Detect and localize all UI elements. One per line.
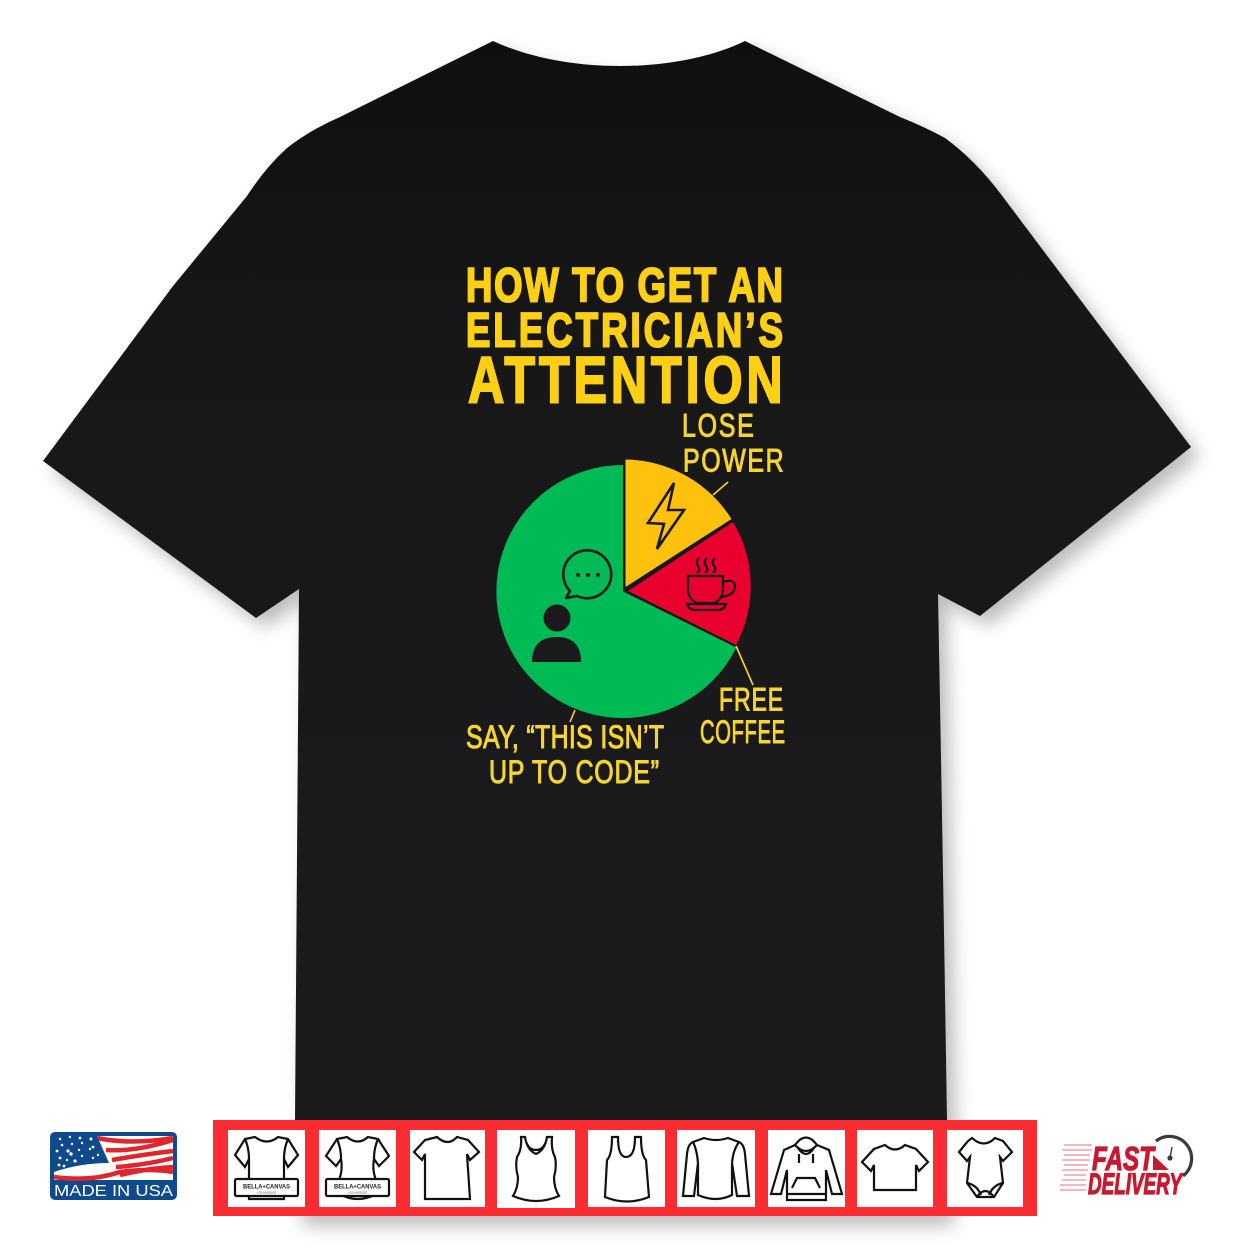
icon: coffee cup bbox=[687, 558, 735, 610]
pie labels bbox=[466, 409, 785, 791]
icon: person bbox=[532, 604, 581, 662]
pie chart bbox=[496, 460, 751, 718]
tile: unisex tee: LOS ANGELES bbox=[257, 1190, 276, 1194]
label: free coffee: FREE bbox=[719, 682, 783, 717]
tile: hoodie bbox=[768, 1130, 845, 1207]
title: HOW TO GET AN bbox=[466, 259, 783, 313]
badge: fast delivery: FAST bbox=[1092, 1140, 1156, 1177]
label: free coffee: COFFEE bbox=[700, 714, 785, 750]
title: ATTENTION bbox=[468, 344, 783, 417]
slice: say this isn't up to code bbox=[496, 465, 736, 718]
gauge bbox=[1156, 1136, 1192, 1176]
tile: classic tee bbox=[410, 1130, 485, 1207]
badge: made in usa: MADE IN USA bbox=[54, 1183, 174, 1200]
icon: lightning bolt bbox=[648, 483, 684, 549]
label: say this isn't up to code bbox=[466, 710, 664, 791]
slice: free coffee bbox=[628, 522, 751, 645]
badge: made in usa bbox=[50, 1132, 177, 1200]
tile: long sleeve bbox=[677, 1130, 755, 1207]
product strip bbox=[213, 1120, 1037, 1216]
tile: unisex tee: BELLA+CANVAS bbox=[243, 1184, 290, 1190]
tile: baby onesie bbox=[947, 1130, 1023, 1207]
tile: tank top bbox=[588, 1130, 665, 1207]
tile: crop top bbox=[857, 1130, 933, 1207]
tile: unisex tee bbox=[228, 1130, 305, 1207]
title: ELECTRICIAN’S bbox=[466, 304, 783, 358]
label: lose power bbox=[682, 409, 784, 495]
speed lines bbox=[1060, 1145, 1092, 1190]
label: lose power: POWER bbox=[683, 444, 784, 479]
badge: fast delivery bbox=[1060, 1136, 1192, 1201]
label: free coffee bbox=[700, 646, 785, 750]
icon: speech bubble bbox=[563, 550, 611, 598]
tile: women's tee: LOS ANGELES bbox=[348, 1190, 367, 1194]
label: say this isn't up to code: SAY, “THIS ISN’T bbox=[466, 720, 664, 756]
label: say this isn't up to code: UP TO CODE” bbox=[489, 755, 659, 791]
tile: women's tee bbox=[319, 1130, 396, 1207]
tile: racerback tank bbox=[497, 1130, 575, 1208]
flag stripes bbox=[54, 1138, 173, 1179]
slice: lose power bbox=[626, 460, 732, 587]
badge: fast delivery: DELIVERY bbox=[1088, 1168, 1184, 1201]
tile: women's tee: BELLA+CANVAS bbox=[334, 1184, 381, 1190]
title bbox=[466, 259, 783, 417]
label: lose power: LOSE bbox=[682, 409, 754, 444]
flag canton bbox=[54, 1136, 109, 1172]
